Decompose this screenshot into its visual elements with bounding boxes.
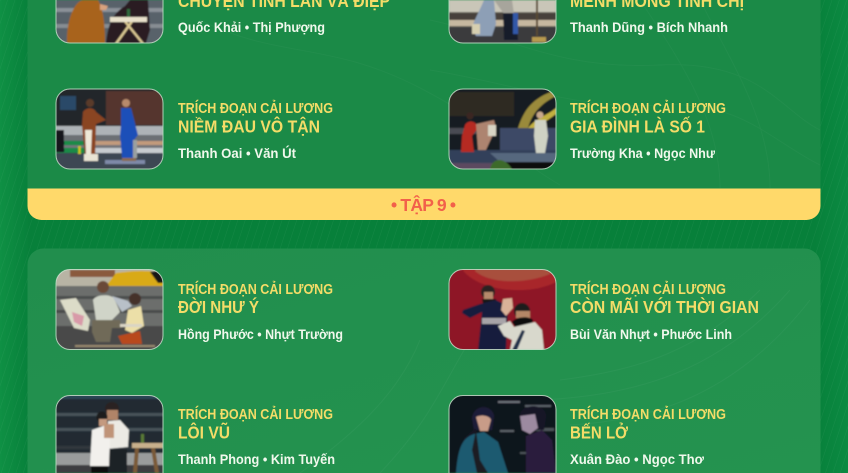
title: GIA ĐÌNH LÀ SỐ 1 xyxy=(570,116,705,136)
card: Đời như ý xyxy=(56,269,343,350)
photo frame xyxy=(56,396,163,473)
card: Gia đình là số 1 xyxy=(449,89,726,169)
cast names: Bùi Văn Nhựt • Phước Linh xyxy=(570,326,732,342)
photo: woman and man facing each other xyxy=(449,395,556,473)
cast names: Quốc Khải • Thị Phượng xyxy=(178,19,325,35)
photo frame xyxy=(56,89,163,169)
card: Niềm đau vô tận xyxy=(56,89,333,169)
title: CÒN MÃI VỚI THỜI GIAN xyxy=(570,296,759,317)
photo frame xyxy=(56,0,163,43)
cast names: Trường Kha • Ngọc Như xyxy=(570,145,716,161)
photo: two bearded actors on red xyxy=(449,269,556,350)
title: BẾN LỞ xyxy=(570,422,628,442)
photo: family scene on dark stage xyxy=(449,89,556,169)
photo: man and child on steps xyxy=(56,269,163,350)
cast names: Xuân Đào • Ngọc Thơ xyxy=(570,451,704,467)
category label: TRÍCH ĐOẠN CẢI LƯƠNG xyxy=(570,406,726,423)
card: Bến lở xyxy=(449,395,726,473)
card: Còn mãi với thời gian xyxy=(449,269,759,350)
category label: TRÍCH ĐOẠN CẢI LƯƠNG xyxy=(570,100,726,117)
cast names: Thanh Oai • Văn Út xyxy=(178,144,296,161)
cast names: Hồng Phước • Nhựt Trường xyxy=(178,326,343,342)
photo: kneeling man and seated man xyxy=(449,0,556,43)
cast names: Thanh Phong • Kim Tuyến xyxy=(178,451,335,467)
title: ĐỜI NHƯ Ý xyxy=(178,296,259,317)
photo: monk and seated man xyxy=(56,0,163,43)
panel: episode 9 xyxy=(28,248,820,473)
photo frame xyxy=(449,396,556,473)
card: Mênh mông tình chị xyxy=(449,0,744,43)
category label: TRÍCH ĐOẠN CẢI LƯƠNG xyxy=(178,281,333,298)
episode label: • TẬP 9 • xyxy=(391,194,456,215)
category label: TRÍCH ĐOẠN CẢI LƯƠNG xyxy=(570,281,726,298)
category label: TRÍCH ĐOẠN CẢI LƯƠNG xyxy=(178,100,333,117)
card: Lôi Vũ xyxy=(56,395,335,473)
photo frame xyxy=(449,0,556,43)
title: NIỀM ĐAU VÔ TẬN xyxy=(178,116,320,136)
photo frame xyxy=(449,270,556,350)
card: Chuyện tình Lan và Điệp xyxy=(56,0,390,43)
episode band: Tập 9 xyxy=(28,188,820,220)
cast names: Thanh Dũng • Bích Nhanh xyxy=(570,19,728,35)
category label: TRÍCH ĐOẠN CẢI LƯƠNG xyxy=(178,406,333,423)
title: LÔI VŨ xyxy=(178,422,230,442)
photo frame xyxy=(449,89,556,169)
photo frame xyxy=(56,270,163,350)
photo: brown and blue robed actors xyxy=(56,89,163,169)
panel: upper episode xyxy=(28,0,820,189)
photo: embracing couple beside table xyxy=(56,395,163,473)
